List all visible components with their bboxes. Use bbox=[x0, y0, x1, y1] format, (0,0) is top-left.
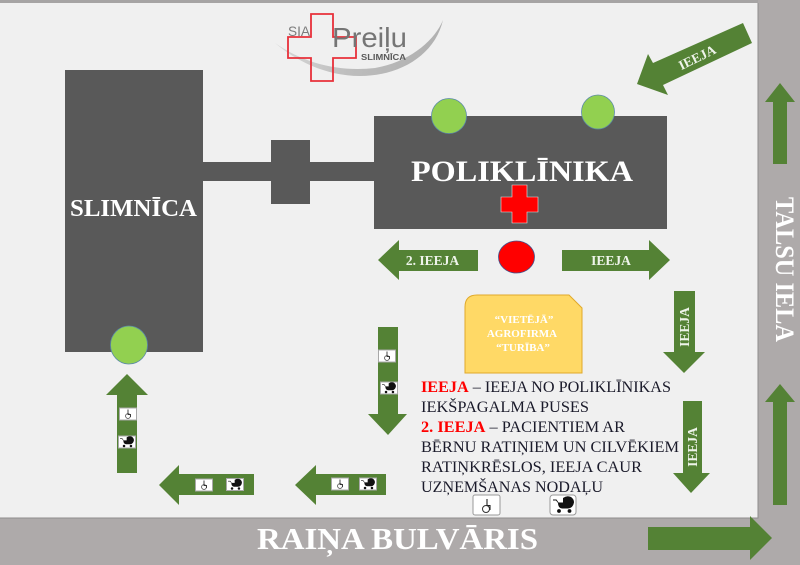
icon: pram bbox=[360, 478, 376, 490]
arrow: entrance right bbox=[562, 240, 670, 280]
arrow label: IEEJA bbox=[685, 427, 700, 467]
arrow: accessible route left 2 bbox=[159, 465, 254, 505]
legend text: 2. IEEJA – PACIENTIEM AR bbox=[421, 419, 625, 436]
icon: wheelchair bbox=[332, 478, 348, 490]
arrow: entrance down 2 bbox=[673, 401, 710, 493]
entrance marker: green circle right bbox=[582, 95, 614, 129]
road label: Raiņa bulvāris: RAIŅA BULVĀRIS bbox=[257, 521, 538, 557]
icon: wheelchair bbox=[196, 479, 212, 491]
icon: pram bbox=[226, 478, 244, 490]
building label: AGROFIRMA bbox=[487, 328, 557, 340]
legend text: IEEJA – IEEJA NO POLIKLĪNIKAS bbox=[421, 379, 671, 396]
road: Raiņa bulvāris bbox=[0, 518, 800, 565]
arrow: Talsu iela upper bbox=[765, 83, 795, 164]
connecting corridor bbox=[203, 140, 374, 204]
road: Talsu iela bbox=[758, 0, 800, 565]
logo: SIA Preiļu slimnīca: SLIMNĪCA bbox=[361, 52, 406, 62]
top edge strip bbox=[0, 0, 800, 3]
legend text bbox=[421, 379, 679, 496]
legend text: IEKŠPAGALMA PUSES bbox=[421, 397, 589, 416]
arrow label: 2. IEEJA bbox=[406, 253, 459, 268]
building: Agrofirma Turība bbox=[465, 295, 582, 373]
building label: Poliklīnika: POLIKLĪNIKA bbox=[411, 155, 633, 188]
arrow: accessible route down bbox=[368, 327, 407, 435]
arrow: Talsu iela lower bbox=[765, 384, 795, 505]
arrow: 2. entrance bbox=[378, 240, 478, 280]
legend text: RATIŅKRĒSLOS, IEEJA CAUR bbox=[421, 459, 642, 476]
building: Poliklīnika bbox=[374, 116, 667, 229]
building label: “TURĪBA” bbox=[496, 342, 550, 354]
logo: SIA Preiļu slimnīca bbox=[275, 14, 443, 81]
legend icon: wheelchair bbox=[473, 495, 500, 515]
arrow label: IEEJA bbox=[591, 253, 631, 268]
entrance marker: green circle left bbox=[432, 98, 466, 134]
logo: SIA Preiļu slimnīca: Preiļu bbox=[332, 22, 407, 53]
icon: pram bbox=[118, 436, 136, 448]
entrance marker: green circle hospital bbox=[110, 326, 148, 364]
legend icon: pram bbox=[550, 495, 576, 515]
building label: “VIETĒJĀ” bbox=[495, 314, 553, 326]
road label: Talsu iela: TALSU IELA bbox=[770, 197, 799, 342]
legend text: UZŅEMŠANAS NODAĻU bbox=[421, 477, 603, 496]
entrance marker: red circle bbox=[498, 241, 534, 273]
icon: pram bbox=[380, 382, 398, 394]
legend text: BĒRNU RATIŅIEM UN CILVĒKIEM bbox=[421, 439, 679, 456]
icon: wheelchair bbox=[378, 350, 396, 362]
arrow: accessible route left 1 bbox=[295, 465, 386, 505]
building: Slimnīca bbox=[65, 70, 203, 352]
arrow label: IEEJA bbox=[677, 307, 692, 347]
building label: Slimnīca: SLIMNĪCA bbox=[70, 196, 198, 222]
icon: red cross bbox=[501, 185, 538, 223]
arrow: accessible route up bbox=[106, 374, 148, 473]
icon: wheelchair bbox=[120, 408, 136, 420]
arrow: diagonal entrance bbox=[637, 23, 752, 95]
logo: SIA Preiļu slimnīca: SIA bbox=[288, 23, 311, 39]
arrow label: IEEJA bbox=[676, 42, 719, 73]
arrow: Raiņa bulvāris bbox=[648, 516, 772, 560]
arrow: entrance down 1 bbox=[663, 291, 705, 373]
